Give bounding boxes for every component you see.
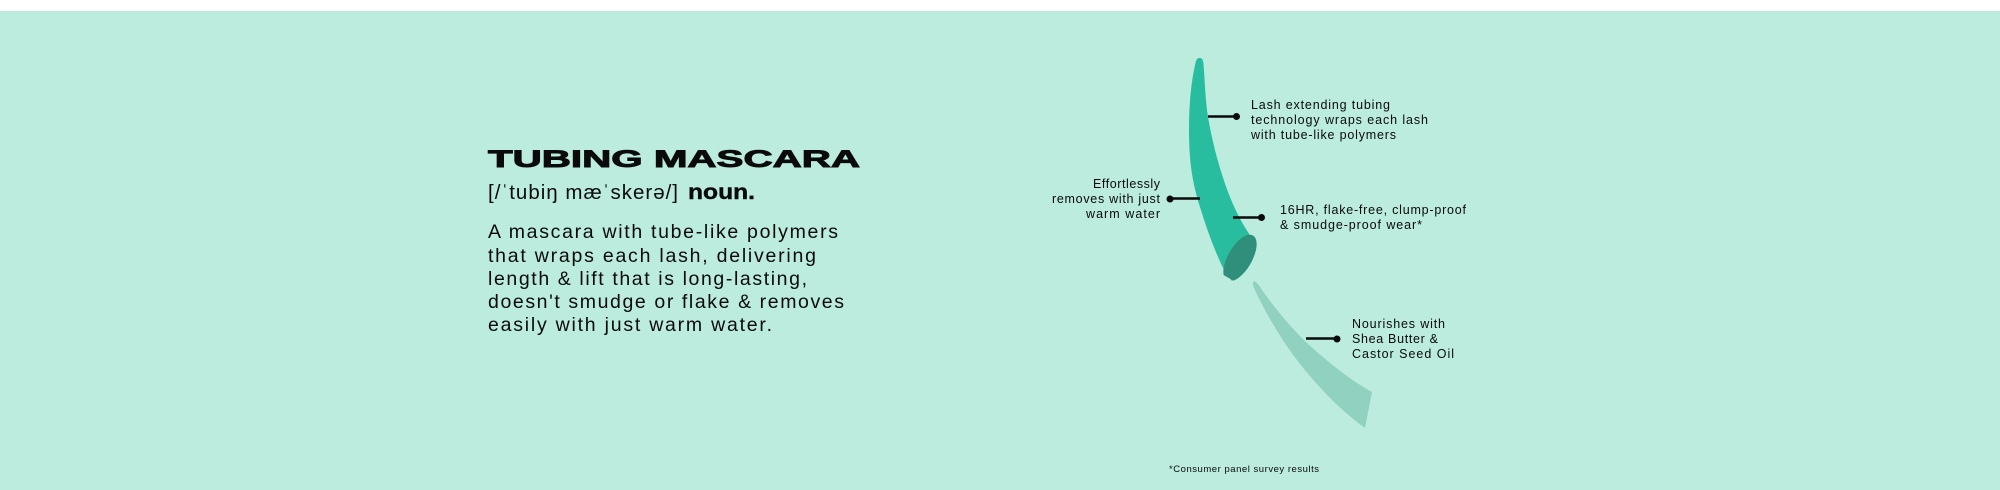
callout: 16HR wear — [1233, 203, 1467, 232]
definition text: A mascara with tube-like polymers — [488, 221, 838, 243]
pronunciation line: noun. — [688, 181, 755, 204]
callout: lash extending: technology wraps each lash — [1251, 113, 1428, 127]
callout: nourishes — [1306, 317, 1454, 361]
callout: removes with warm water — [1052, 177, 1200, 221]
callout: nourishes: Castor Seed Oil — [1352, 347, 1454, 361]
callout: nourishes: Nourishes with — [1352, 317, 1445, 331]
lash illustration: lower tapered lash — [1253, 282, 1372, 428]
footnote: *Consumer panel survey results — [1169, 464, 1319, 475]
definition text: that wraps each lash, delivering — [488, 245, 816, 267]
lash cross-section — [1223, 234, 1257, 281]
definition text: easily with just warm water. — [488, 314, 772, 336]
callout: 16HR wear: & smudge-proof wear* — [1280, 218, 1422, 232]
callout: lash extending — [1208, 98, 1428, 142]
callout: removes with warm water: removes with just — [1052, 192, 1161, 206]
title: TUBING MASCARA — [488, 146, 860, 173]
pronunciation line: [/ˈtubiŋ mæˈskerə/] — [488, 181, 678, 204]
definition text — [488, 221, 844, 336]
definition text: doesn't smudge or flake & removes — [488, 291, 844, 313]
callout: removes with warm water: Effortlessly — [1093, 177, 1161, 191]
callout: lash extending: Lash extending tubing — [1251, 98, 1390, 112]
callout: 16HR wear: 16HR, flake-free, clump-proof — [1280, 203, 1467, 217]
callout: lash extending: with tube-like polymers — [1250, 128, 1396, 142]
lash illustration: tubed lash — [1189, 58, 1257, 281]
callout: removes with warm water: warm water — [1085, 207, 1160, 221]
definition text: length & lift that is long-lasting, — [488, 268, 807, 290]
callout: nourishes: Shea Butter & — [1352, 332, 1439, 346]
